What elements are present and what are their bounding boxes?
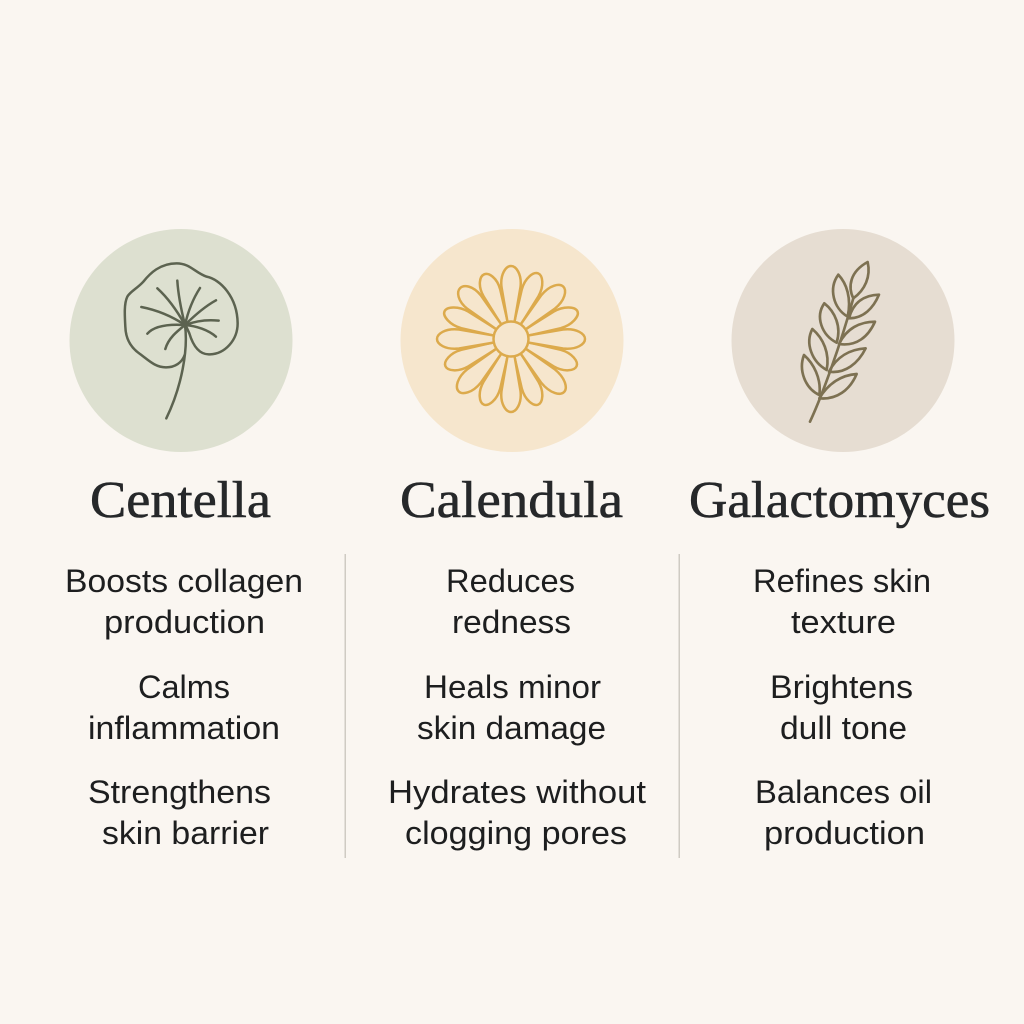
panel: Centella column bbox=[65, 229, 303, 851]
text block: Centella benefits: Boosts collagen bbox=[65, 563, 303, 599]
text block: Galactomyces benefits: Refines skin bbox=[753, 563, 931, 599]
text block: Galactomyces benefits: Balances oil bbox=[755, 774, 932, 810]
text block: Galactomyces benefits bbox=[753, 563, 932, 851]
text block: Galactomyces benefits: dull tone bbox=[780, 710, 907, 746]
text block: Calendula benefits bbox=[388, 563, 646, 851]
text block: Calendula benefits: clogging pores bbox=[405, 815, 627, 851]
panel: Galactomyces column bbox=[689, 229, 990, 851]
heading: Calendula: Calendula bbox=[400, 472, 623, 529]
text block: Calendula benefits: skin damage bbox=[417, 710, 606, 746]
text block: Centella benefits: Strengthens bbox=[88, 774, 271, 810]
text block: Galactomyces benefits: texture bbox=[791, 604, 896, 640]
text block: Centella benefits: Calms bbox=[138, 669, 230, 705]
text block: Calendula benefits: Heals minor bbox=[424, 669, 601, 705]
icon: calendula flower in peach circle bbox=[400, 229, 624, 452]
icon: grain sprig in taupe circle bbox=[732, 229, 954, 452]
text block: Calendula benefits: redness bbox=[452, 604, 571, 640]
text block: Calendula benefits: Hydrates without bbox=[388, 774, 646, 810]
icon: centella leaf in green circle bbox=[70, 229, 292, 452]
heading: Galactomyces: Galactomyces bbox=[689, 472, 990, 529]
heading: Centella: Centella bbox=[90, 472, 271, 529]
text block: Galactomyces benefits: production bbox=[764, 815, 925, 851]
text block: Centella benefits: production bbox=[104, 604, 265, 640]
text block: Centella benefits: inflammation bbox=[88, 710, 280, 746]
text block: Centella benefits: skin barrier bbox=[102, 815, 269, 851]
text block: Centella benefits bbox=[65, 563, 303, 851]
text block: Galactomyces benefits: Brightens bbox=[770, 669, 913, 705]
panel: Calendula column bbox=[388, 229, 646, 851]
text block: Calendula benefits: Reduces bbox=[446, 563, 575, 599]
